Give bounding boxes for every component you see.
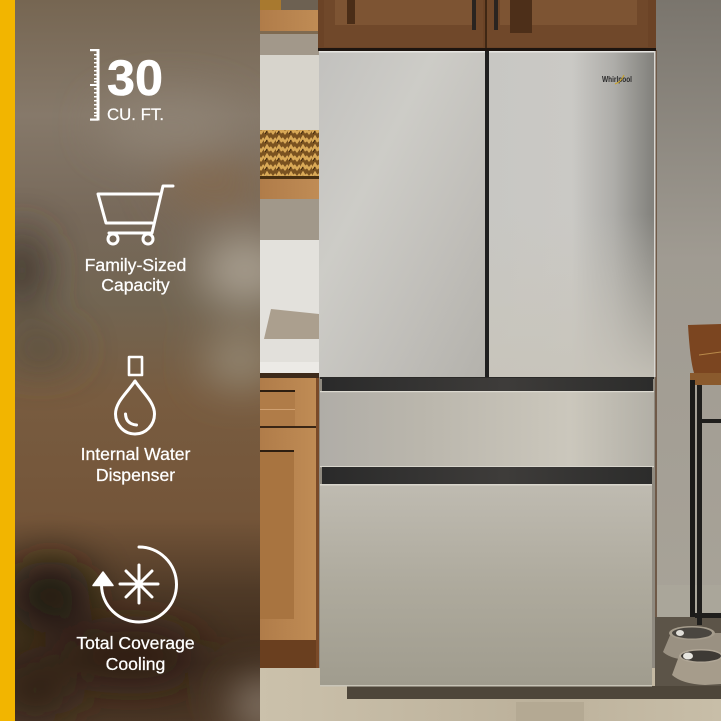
icon: shopping cart [98,186,173,244]
right french door [489,51,656,377]
left shelves and cabinet [260,0,319,678]
feature: family-sized capacity: Capacity [101,275,170,295]
label: Total Coverage [76,633,195,653]
capacity unit: CU. FT. [107,105,164,124]
refrigerator [319,51,656,686]
capacity block [90,49,164,124]
brand logo: Whirlpool [602,75,632,84]
label: Family-Sized [85,255,186,275]
middle drawer [320,391,654,467]
side table and bag [688,324,721,625]
icon: ruler [90,49,100,121]
feature: total coverage cooling [76,547,195,674]
feature: total coverage cooling: Cooling [106,654,165,674]
accent bar [0,0,15,721]
upper wood cabinet [318,0,656,51]
freezer drawer [320,484,652,686]
pet bowls [663,626,721,685]
feature: family-sized capacity [85,186,186,295]
feature: internal water dispenser: Dispenser [96,465,175,485]
gap above freezer [322,467,652,484]
left french door [319,51,485,377]
panel: translucent sidebar [15,0,260,721]
capacity number: 30 [107,50,163,106]
gap under doors [320,377,654,391]
door divider [485,51,489,377]
icon: cooling cycle [93,547,176,622]
label: Internal Water [81,444,191,464]
background kitchen wall [260,0,721,721]
floor [260,617,721,721]
icon: water drop [116,357,154,434]
feature: internal water dispenser [81,357,191,485]
